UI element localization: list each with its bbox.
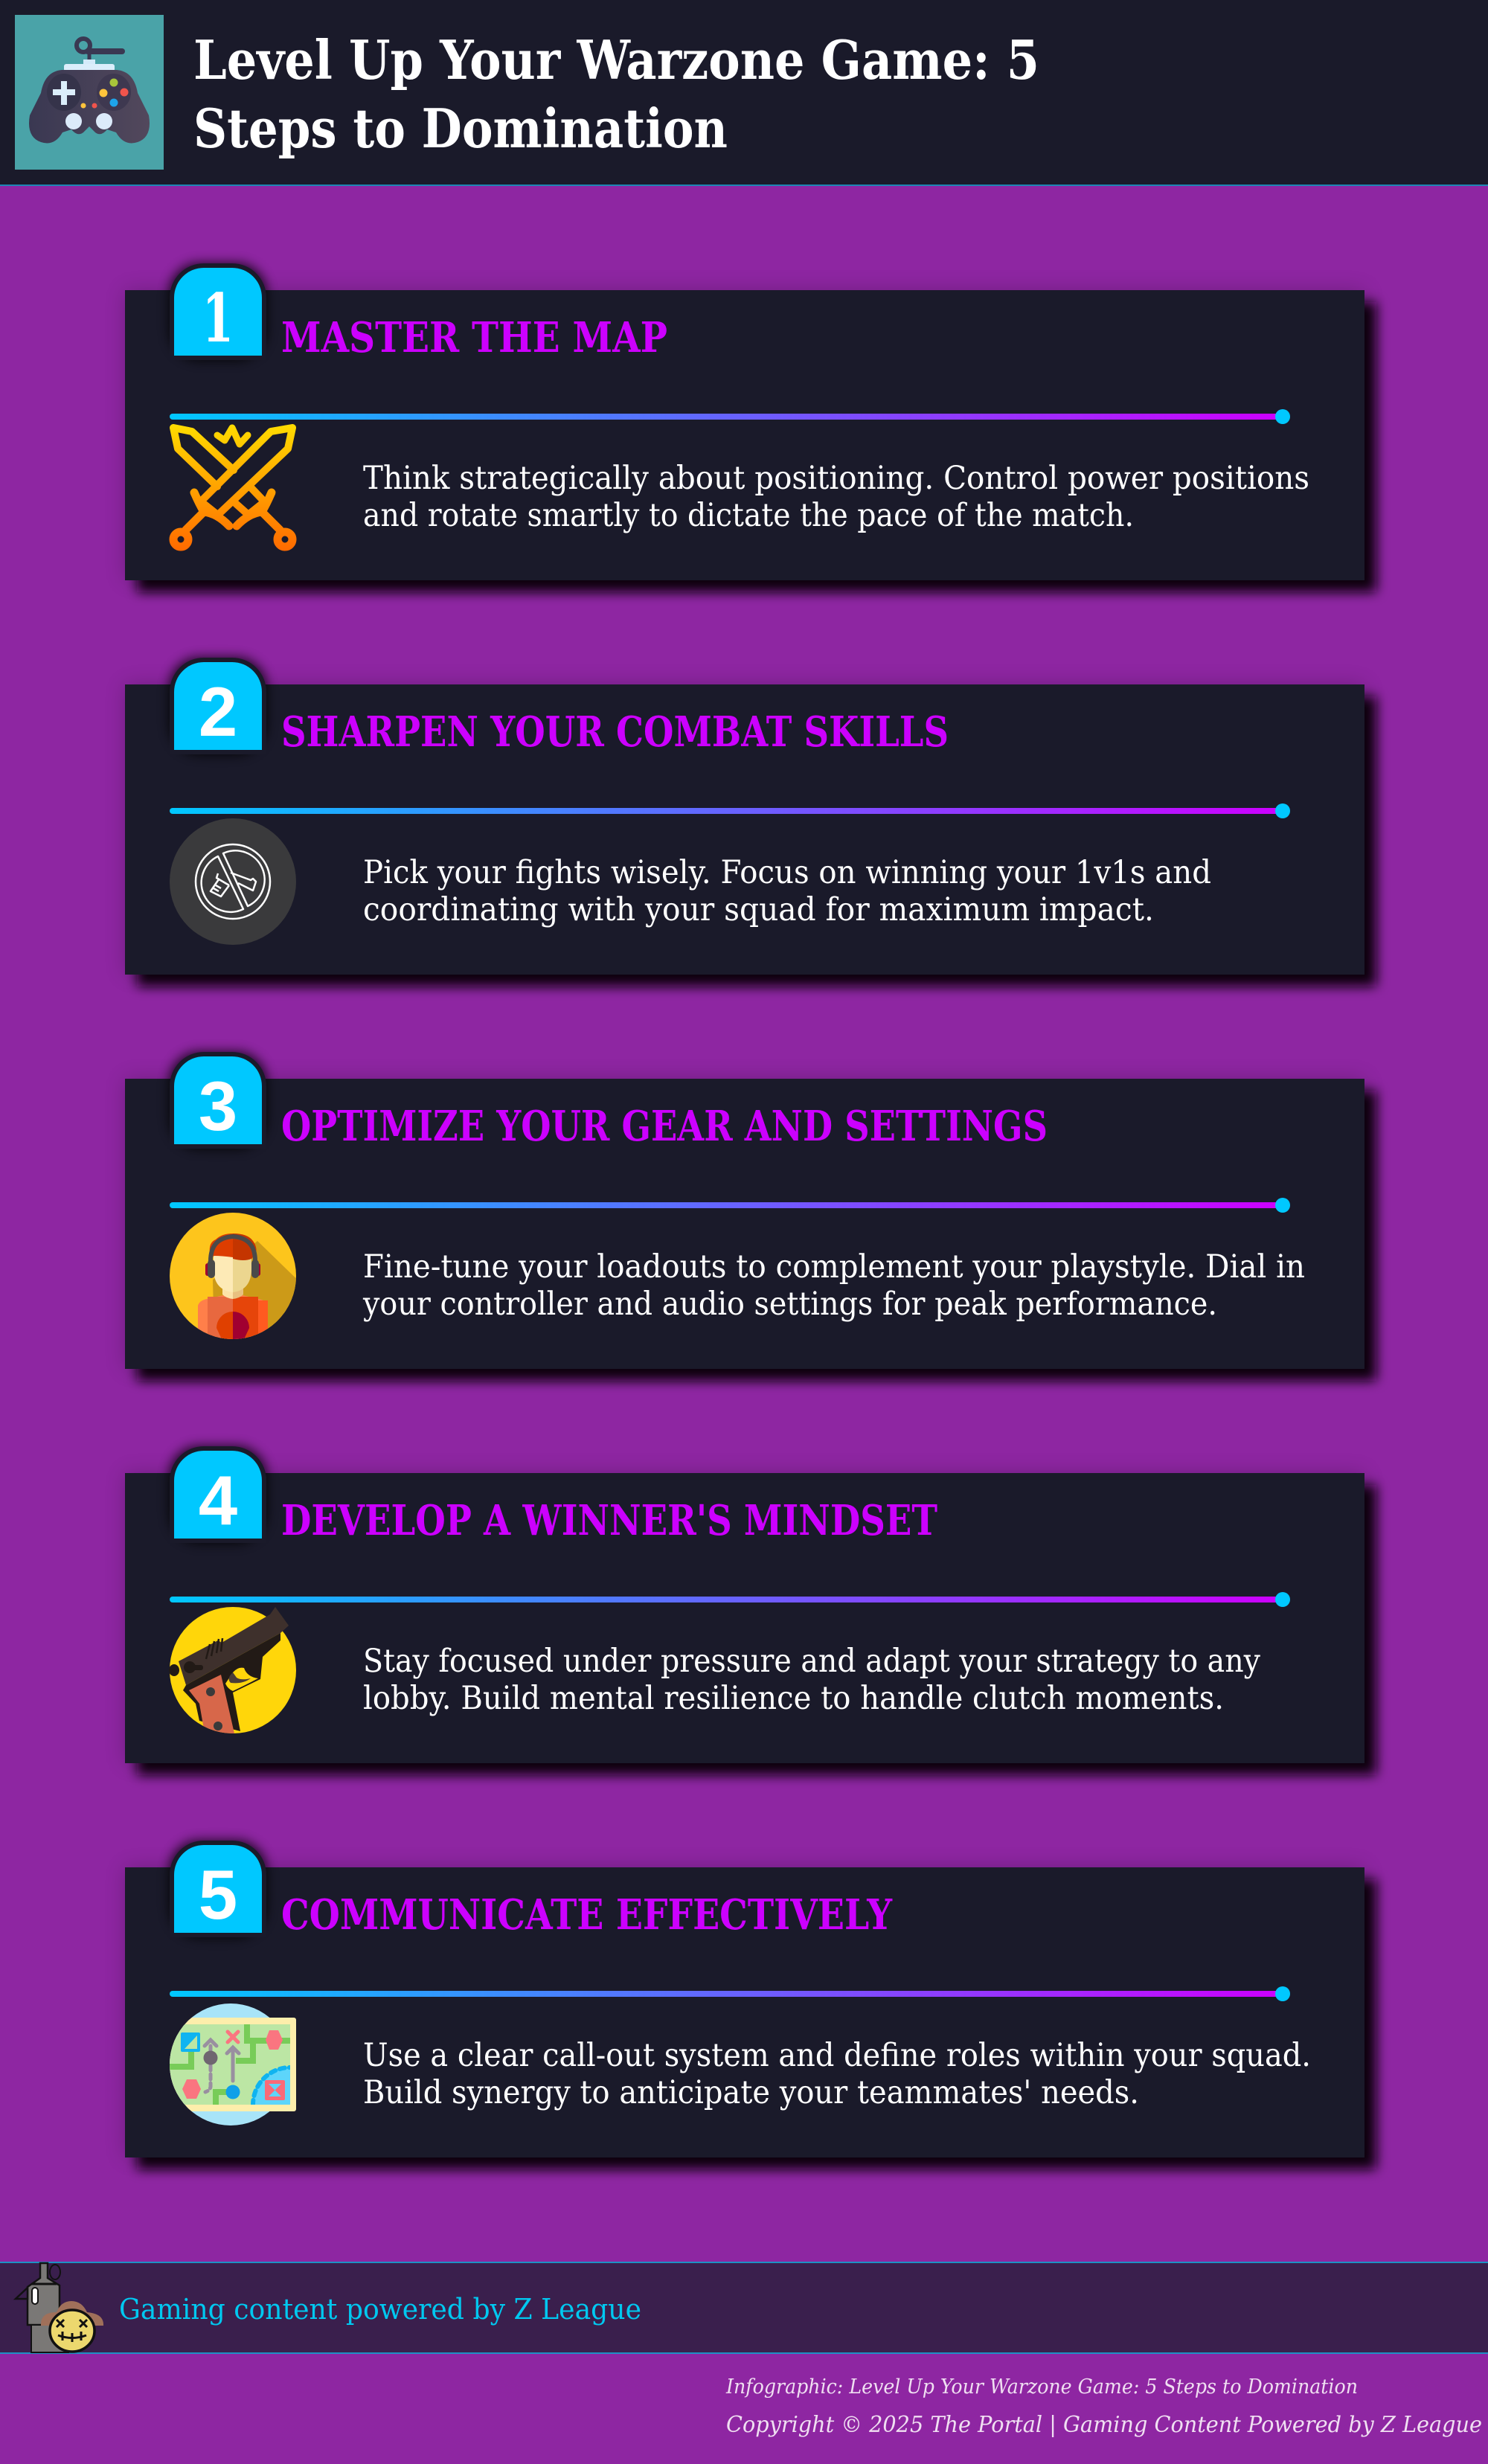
- number badge 2: [174, 662, 262, 751]
- panel: step 1: [125, 263, 1376, 592]
- body text: [363, 854, 1211, 928]
- footer bar text: Gaming content powered by Z League: [119, 2293, 641, 2326]
- body text: your controller and audio settings for peak performance.: [362, 1286, 1217, 1323]
- number badge 3: 3: [199, 1067, 237, 1145]
- icon: scarecrow mascot: [16, 2263, 103, 2352]
- footer bar: [0, 2262, 1488, 2354]
- icon: no guns sign: [170, 818, 296, 945]
- number badge 1: 1: [202, 279, 234, 358]
- title: Level Up Your Warzone Game: 5: [193, 28, 1039, 92]
- number badge 4: 4: [199, 1461, 237, 1539]
- number badge 5: [174, 1845, 262, 1934]
- divider with dot: [170, 409, 1290, 424]
- footer credits: [725, 2375, 1482, 2438]
- title: Steps to Domination: [193, 97, 728, 160]
- panel: step 4: [125, 1446, 1376, 1775]
- panel: step 5: [125, 1841, 1376, 2169]
- number badge 5: 5: [199, 1855, 237, 1934]
- divider with dot: [170, 1986, 1290, 2001]
- icon: game controller: [15, 15, 164, 170]
- title: [193, 28, 1039, 160]
- footer credits: Infographic: Level Up Your Warzone Game: 5 Steps to Domination: [725, 2375, 1358, 2399]
- body text: [363, 460, 1309, 534]
- body text: Think strategically about positioning. Control power positions: [363, 460, 1309, 497]
- body text: Use a clear call-out system and define roles within your squad.: [363, 2037, 1311, 2074]
- divider with dot: [170, 1592, 1290, 1607]
- panel: step 3: [125, 1052, 1376, 1381]
- body text: Build synergy to anticipate your teammates' needs.: [363, 2074, 1139, 2111]
- body text: Stay focused under pressure and adapt your strategy to any: [363, 1643, 1261, 1680]
- body text: [362, 1248, 1305, 1323]
- body text: and rotate smartly to dictate the pace of the match.: [363, 497, 1134, 534]
- body text: lobby. Build mental resilience to handle clutch moments.: [363, 1680, 1224, 1717]
- panel: step 2: [125, 658, 1376, 986]
- number badge 2: 2: [199, 673, 237, 751]
- heading: DEVELOP A WINNER'S MINDSET: [281, 1496, 937, 1545]
- number badge 4: [174, 1451, 262, 1539]
- body text: Pick your fights wisely. Focus on winning your 1v1s and: [363, 854, 1211, 891]
- divider with dot: [170, 1198, 1290, 1213]
- icon: pistol: [169, 1607, 296, 1733]
- number badge 3: [174, 1056, 262, 1145]
- body text: [363, 2037, 1311, 2111]
- body text: [363, 1643, 1261, 1717]
- number badge 1: [174, 268, 262, 358]
- heading: COMMUNICATE EFFECTIVELY: [281, 1890, 893, 1940]
- divider with dot: [170, 803, 1290, 818]
- header: [0, 0, 1488, 186]
- icon: crossed swords: [173, 428, 292, 547]
- body text: Fine-tune your loadouts to complement your playstyle. Dial in: [363, 1248, 1305, 1286]
- heading: MASTER THE MAP: [281, 313, 667, 362]
- icon: gamer with headset: [170, 1213, 296, 1339]
- icon: tactical map: [170, 2003, 296, 2125]
- body text: coordinating with your squad for maximum impact.: [363, 891, 1154, 928]
- heading: SHARPEN YOUR COMBAT SKILLS: [281, 708, 949, 757]
- heading: OPTIMIZE YOUR GEAR AND SETTINGS: [281, 1102, 1048, 1151]
